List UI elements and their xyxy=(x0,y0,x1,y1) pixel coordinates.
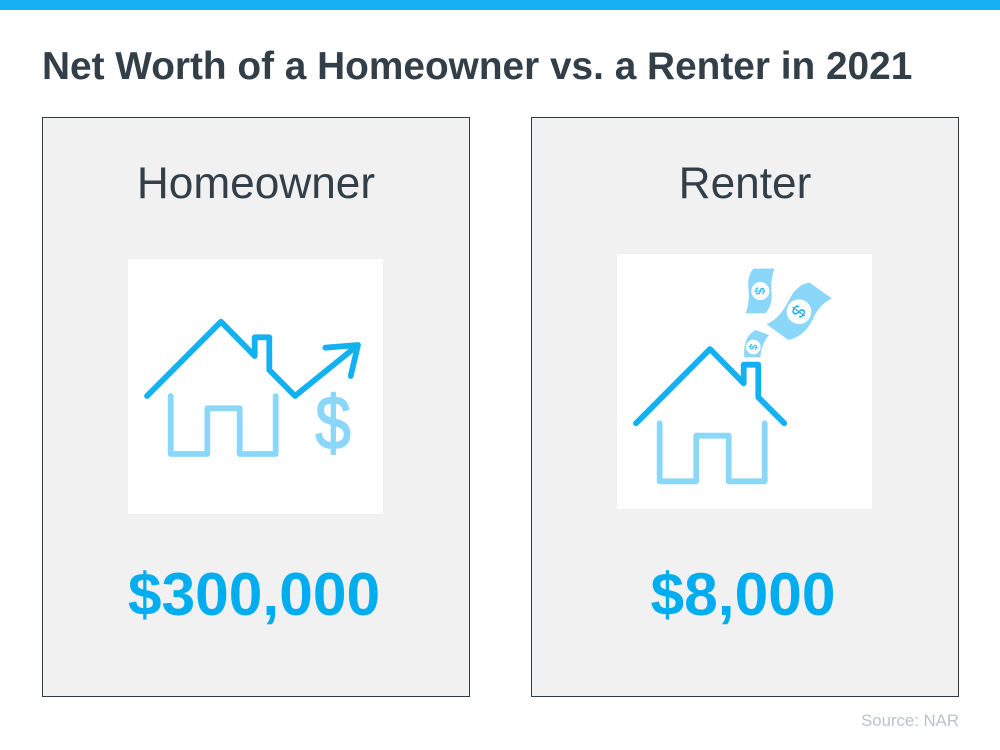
icon: house with money leaving the chimney: $ xyxy=(753,287,768,295)
top bar xyxy=(0,0,1000,10)
title: Net Worth of a Homeowner vs. a Renter in 2021 xyxy=(42,45,912,88)
panel: homeowner xyxy=(42,117,470,697)
heading: homeowner: Homeowner xyxy=(137,159,375,208)
heading: renter: Renter xyxy=(679,159,811,208)
source: Source: NAR xyxy=(861,711,959,730)
icon: house with money leaving the chimney: $ xyxy=(746,343,759,351)
icon: house with money leaving the chimney: $ xyxy=(787,301,810,322)
value: renter net worth: $8,000 xyxy=(650,560,836,628)
icon background: homeowner xyxy=(128,259,383,514)
icon background: renter xyxy=(617,254,872,509)
icon: house with rising arrow and dollar: $ xyxy=(315,380,351,465)
panel: renter xyxy=(531,117,959,697)
value: homeowner net worth: $300,000 xyxy=(128,560,380,628)
